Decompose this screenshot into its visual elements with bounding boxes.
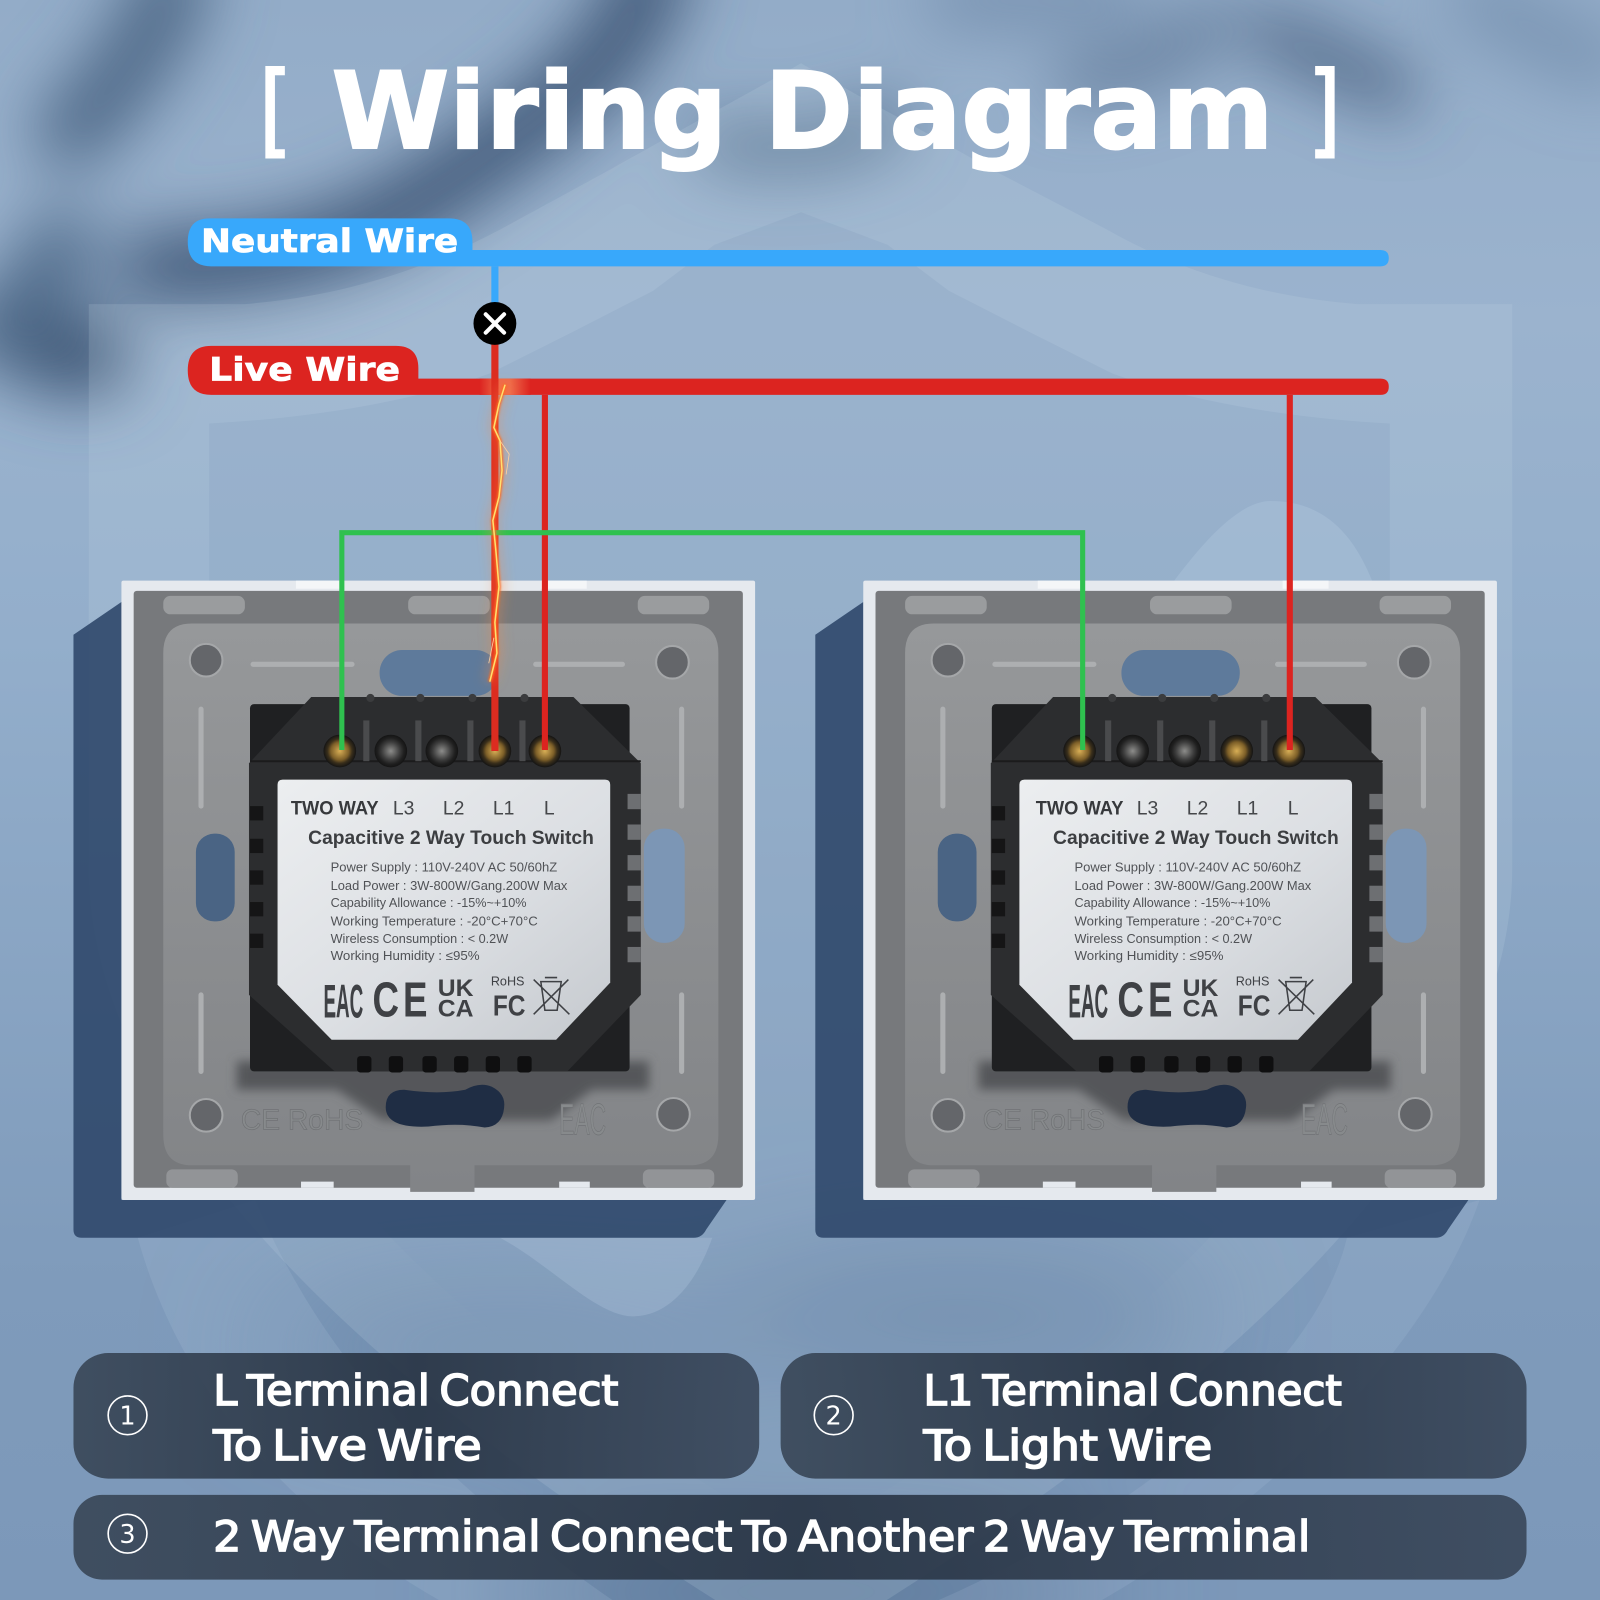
step 2 text: L1 Terminal Connect (923, 1366, 1342, 1415)
step 2 text (922, 1366, 1342, 1470)
right switch module (991, 694, 1383, 1072)
left certification marks: C (372, 973, 399, 1027)
right specs: Wireless Consumption : < 0.2W (1074, 931, 1253, 946)
right specs (1074, 859, 1312, 963)
left switch frame (121, 581, 755, 1200)
wire: left L to live (542, 395, 548, 750)
left specs: Load Power : 3W-800W/Gang.200W Max (331, 878, 568, 893)
step 2 instruction (781, 1353, 1527, 1479)
left certification marks: EAC (323, 975, 363, 1027)
icon: step number 1: 1 (119, 1401, 136, 1431)
right specs: Working Temperature : -20°C+70°C (1074, 914, 1282, 929)
lightning spark along L1 wire (489, 385, 509, 682)
left certification marks: E (403, 973, 428, 1027)
right certification marks: FC (1238, 990, 1270, 1022)
title: ] (1314, 48, 1339, 159)
right specs: Load Power : 3W-800W/Gang.200W Max (1074, 878, 1312, 893)
right certification marks: RoHS (1236, 974, 1269, 989)
right spec label (1019, 780, 1352, 1040)
right certification marks (1068, 973, 1314, 1027)
shield: inner layer (209, 212, 1390, 1541)
step 3 text: 2 Way Terminal Connect To Another 2 Way Terminal (213, 1512, 1310, 1561)
icon: step number 3: 3 (119, 1520, 136, 1550)
left terminal names: L3 (393, 797, 414, 819)
switch left: rear view (73, 581, 755, 1238)
left terminal names: L2 (443, 797, 464, 819)
left specs: Working Temperature : -20°C+70°C (331, 914, 538, 929)
left terminal names (291, 797, 555, 819)
icon: step number 2 (814, 1396, 853, 1435)
step 1 text: To Live Wire (212, 1421, 482, 1470)
live wire with label: Live Wire (209, 353, 400, 389)
left spec label (278, 780, 610, 1040)
switch right: rear view (815, 581, 1497, 1238)
left embossed marks: EAC (559, 1094, 606, 1145)
title: [ (261, 48, 286, 159)
right specs: Working Humidity : ≤95% (1074, 948, 1224, 963)
step 1 text (212, 1366, 618, 1470)
left certification marks: UK (438, 975, 474, 1002)
icon: step number 1 (108, 1396, 147, 1435)
left embossed marks: CE RoHS (241, 1105, 363, 1137)
wire: two way link between switches (342, 533, 1083, 750)
left specs: Power Supply : 110V-240V AC 50/60hZ (331, 859, 557, 874)
left certification marks: RoHS (491, 974, 524, 989)
step 1 text: L Terminal Connect (213, 1366, 618, 1415)
right terminal names: L1 (1237, 797, 1258, 819)
right embossed marks: CE RoHS (983, 1105, 1105, 1137)
left specs: Working Humidity : ≤95% (331, 948, 480, 963)
right certification marks: C (1117, 973, 1144, 1027)
right specs: Capability Allowance : -15%~+10% (1074, 895, 1271, 910)
right switch shadow (815, 602, 1468, 1238)
icon: step number 3 (108, 1514, 147, 1553)
icon: break marker on neutral to L1 (473, 302, 516, 345)
left terminal names: TWO WAY (291, 797, 379, 819)
right certification marks: EAC (1068, 975, 1108, 1027)
right terminal names (1036, 797, 1299, 819)
right mounting plate (905, 623, 1460, 1192)
right certification marks: CA (1183, 995, 1219, 1022)
right specs: Power Supply : 110V-240V AC 50/60hZ (1074, 859, 1301, 874)
right terminal names: TWO WAY (1036, 797, 1124, 819)
icon: step number 2: 2 (826, 1401, 842, 1431)
step 2 text: To Light Wire (922, 1421, 1212, 1470)
left specs: Capability Allowance : -15%~+10% (331, 895, 527, 910)
right certification marks: E (1148, 973, 1172, 1027)
left certification marks: CA (438, 995, 474, 1022)
left mounting plate (163, 623, 718, 1192)
left specs: Wireless Consumption : < 0.2W (331, 931, 509, 946)
right switch frame (863, 581, 1497, 1200)
left certification marks: FC (493, 990, 526, 1022)
left product name: Capacitive 2 Way Touch Switch (308, 827, 594, 849)
neutral wire with label (188, 218, 1389, 307)
title: Wiring Diagram (332, 50, 1273, 174)
left terminal names: L1 (493, 797, 514, 819)
right embossed marks: EAC (1301, 1094, 1348, 1145)
left specs (331, 859, 568, 963)
left switch shadow (73, 602, 727, 1238)
step 1 instruction (73, 1353, 759, 1479)
right certification marks: UK (1183, 975, 1219, 1002)
right terminal names: L (1288, 797, 1299, 819)
wire: L1 from live wire, interrupted (491, 343, 498, 751)
right terminal names: L3 (1137, 797, 1158, 819)
left certification marks (323, 973, 569, 1027)
live wire with label (188, 346, 1389, 395)
neutral wire with label: Neutral Wire (201, 224, 458, 260)
right embossed marks (983, 1094, 1348, 1145)
right terminal names: L2 (1187, 797, 1208, 819)
left embossed marks (241, 1094, 606, 1145)
right product name: Capacitive 2 Way Touch Switch (1053, 827, 1339, 849)
left terminal names: L (544, 797, 555, 819)
wire: right L to live (1287, 395, 1293, 750)
left switch module (249, 694, 641, 1072)
step 3 instruction (73, 1495, 1527, 1580)
